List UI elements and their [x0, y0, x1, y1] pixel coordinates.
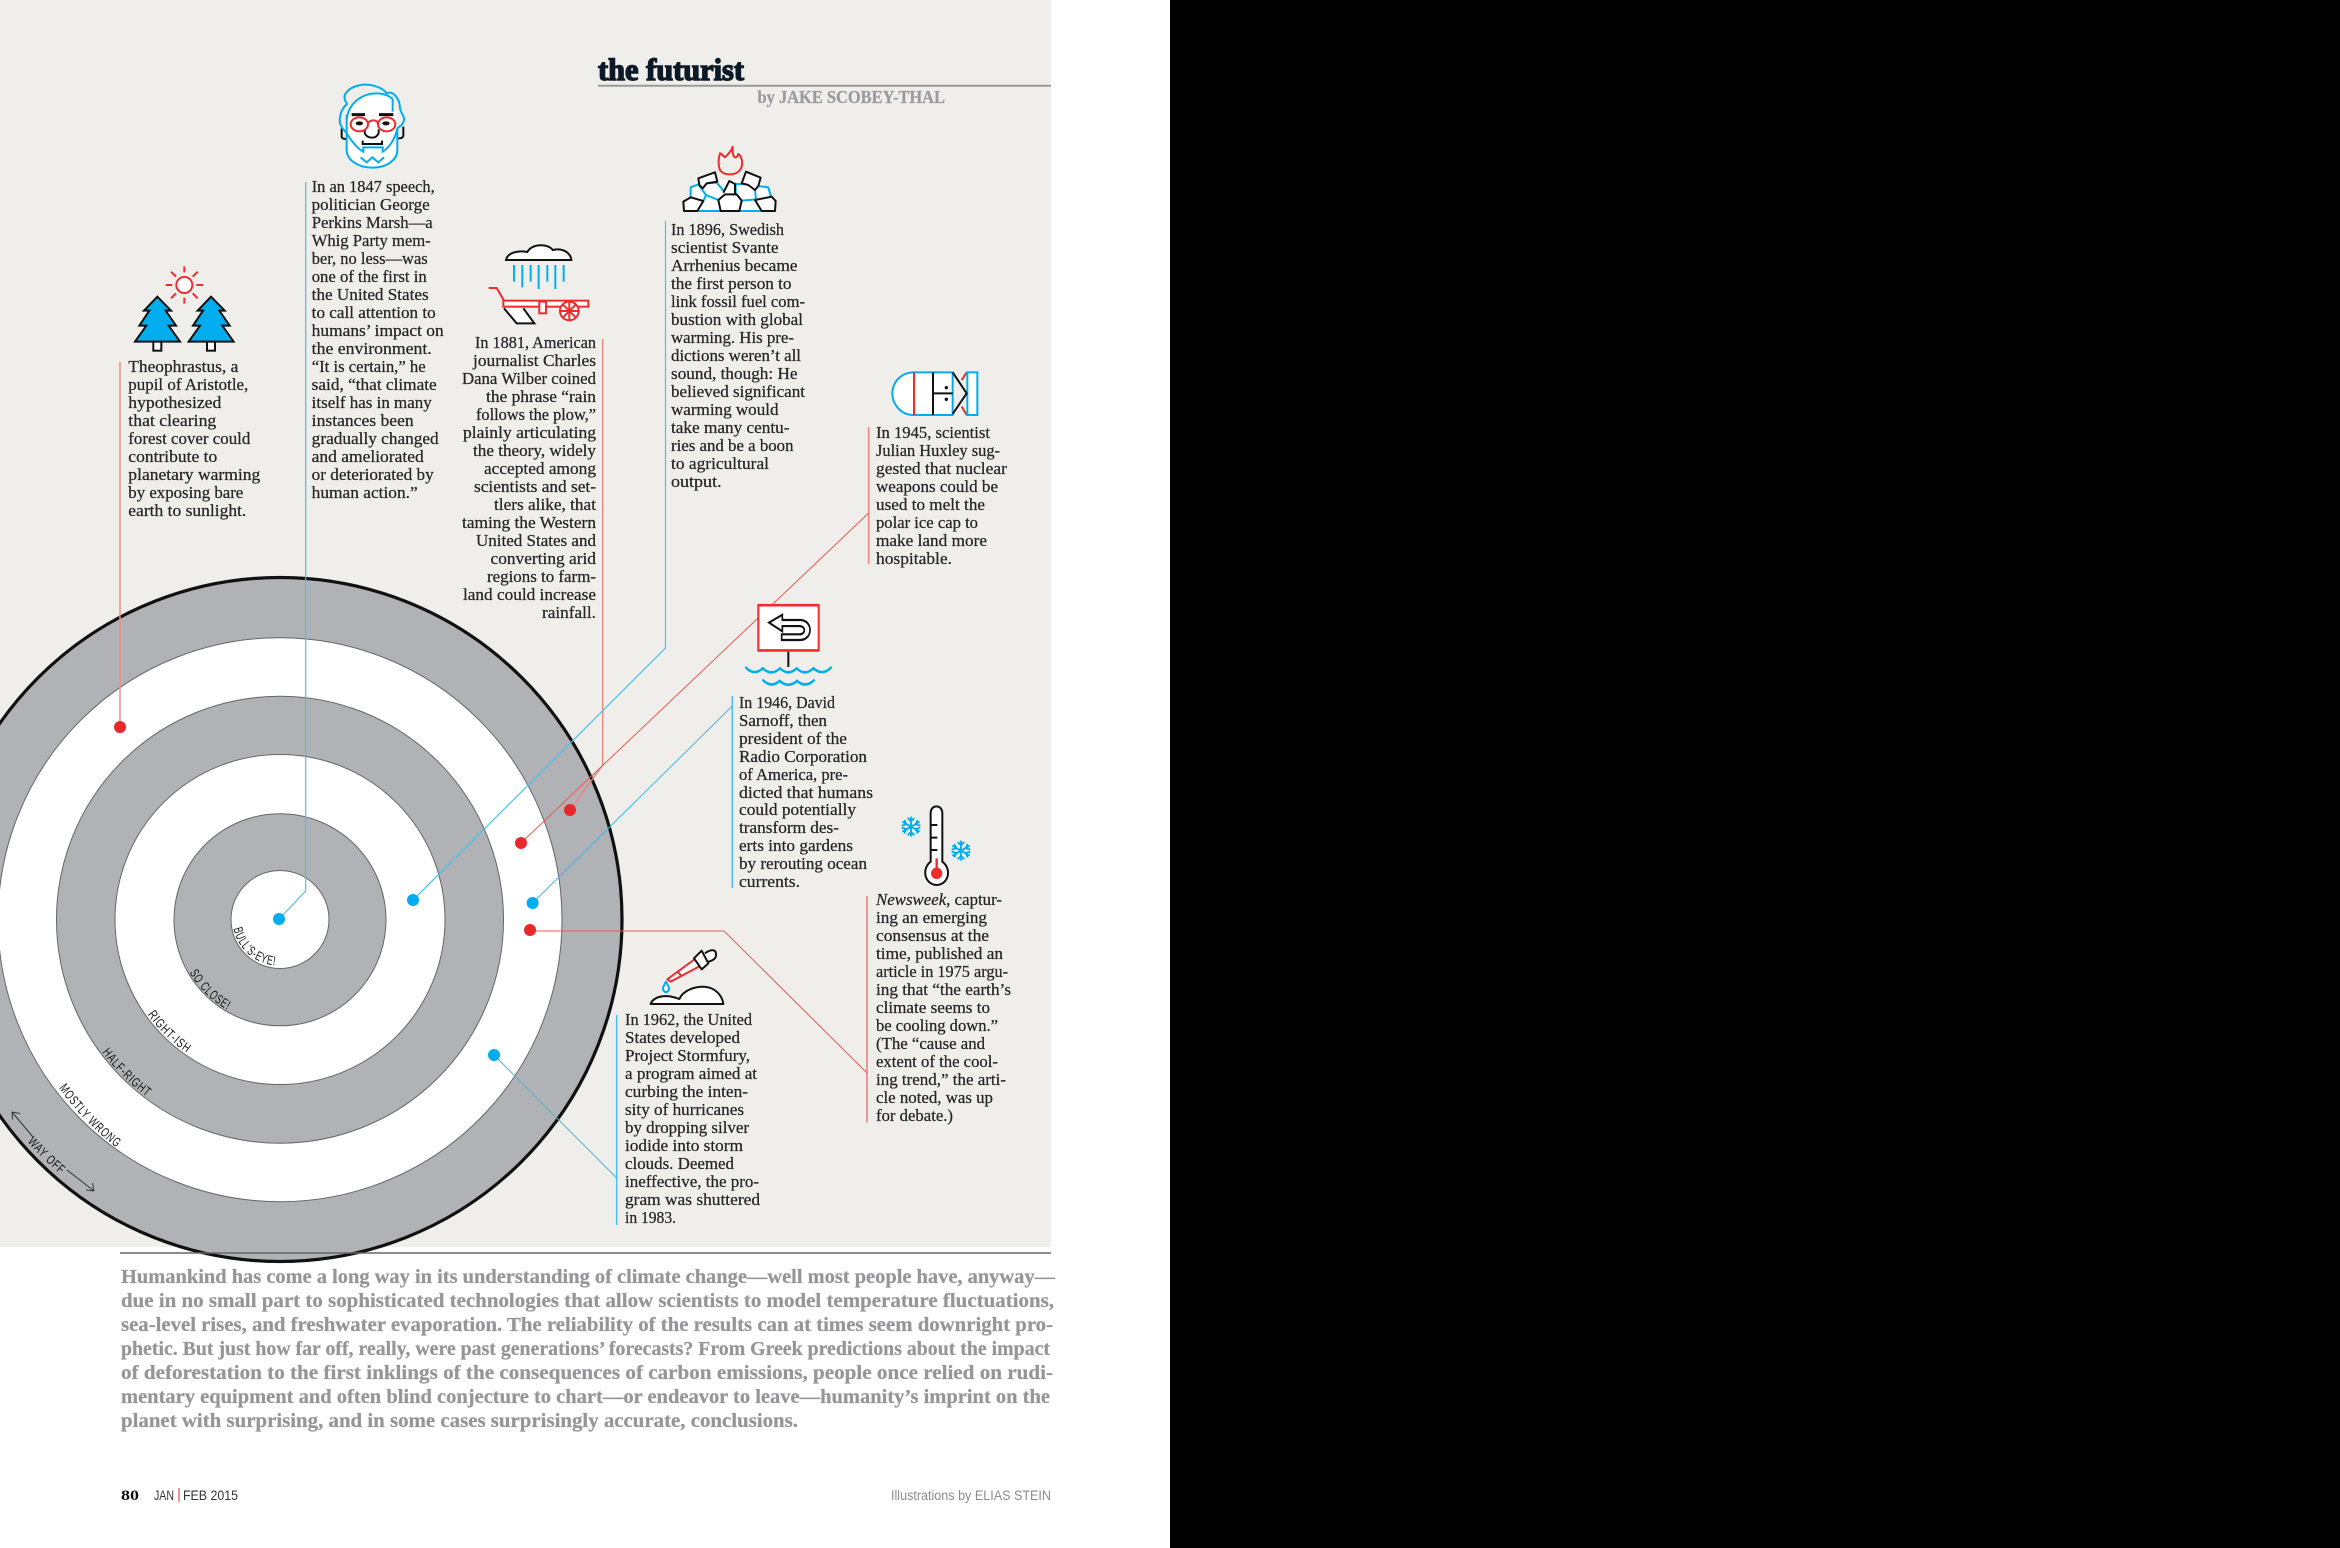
ring label: way off: WAY OFF	[28, 1136, 66, 1172]
text block: Theophrastus: earth to sunlight.	[128, 501, 246, 520]
byline: by JAKE SCOBEY-THAL	[758, 87, 945, 107]
icon: George Perkins Marsh portrait	[340, 85, 404, 168]
text block: Sarnoff: Sarnoff, then	[739, 711, 828, 730]
text block: Sarnoff: erts into gardens	[739, 836, 853, 855]
text block: Marsh: Perkins Marsh—a	[312, 213, 433, 232]
text block: Newsweek	[875, 890, 1011, 1125]
text block: Arrhenius: sound, though: He	[671, 364, 798, 383]
text block: Arrhenius: bustion with global	[671, 310, 803, 329]
header: the futurist: the futurist	[598, 52, 745, 87]
footer: illustration credit: Illustrations by ELIAS STEIN	[891, 1488, 1051, 1503]
text block: Sarnoff: of America, pre-	[739, 765, 848, 784]
text block: Marsh: to call attention to	[312, 303, 436, 322]
text block: Wilber: plainly articulating	[463, 423, 597, 442]
text block: Marsh: or deteriorated by	[312, 465, 434, 484]
text block: Arrhenius: output.	[671, 472, 722, 491]
text block: Stormfury: by dropping silver	[625, 1118, 749, 1137]
text block: Huxley: weapons could be	[876, 477, 998, 496]
ring label: half-right: HALF-RIGHT	[102, 1048, 152, 1096]
text block: Newsweek: Newsweek, captur-	[875, 890, 1002, 909]
text block: Huxley: used to melt the	[876, 495, 985, 514]
ring label: so close: SO CLOSE!	[190, 969, 231, 1010]
intro paragraph: mentary equipment and often blind conjecture to chart—or endeavor to leave—humanity’s imprint on the	[121, 1387, 1050, 1408]
text block: Sarnoff	[739, 693, 873, 891]
text block: Stormfury: ineffective, the pro-	[625, 1172, 759, 1191]
text block: Marsh: politician George	[312, 195, 430, 214]
text block: Wilber: scientists and set-	[474, 477, 596, 496]
text block: Theophrastus	[128, 357, 261, 520]
text block: Stormfury: in 1983.	[625, 1208, 676, 1227]
intro paragraph: phetic. But just how far off, really, were past generations’ forecasts? From Greek predictions about the impact	[121, 1339, 1051, 1360]
text block: Wilber: land could increase	[463, 585, 596, 604]
connector: Marsh	[273, 182, 306, 925]
text block: Marsh: the United States	[312, 285, 429, 304]
text block: Wilber: accepted among	[484, 459, 597, 478]
text block: Marsh: instances been	[312, 411, 414, 430]
text block: Newsweek: extent of the cool-	[876, 1052, 998, 1071]
intro paragraph: sea-level rises, and freshwater evaporation. The reliability of the results can at times seem downright pro-	[121, 1315, 1053, 1336]
connector: Theophrastus	[114, 362, 126, 733]
text block: Stormfury: a program aimed at	[625, 1064, 757, 1083]
text block: Wilber: Dana Wilber coined	[462, 369, 597, 388]
intro paragraph	[121, 1267, 1056, 1432]
text block: Wilber: follows the plow,”	[476, 405, 596, 424]
text block: Huxley: gested that nuclear	[876, 459, 1007, 478]
text block: Theophrastus: Theophrastus, a	[128, 357, 239, 376]
icon: trees and sun	[135, 266, 234, 351]
connector: Wilber	[564, 339, 603, 816]
text block: Wilber: the theory, widely	[473, 441, 597, 460]
text block: Huxley: hospitable.	[876, 549, 952, 568]
text block: Huxley	[876, 423, 1007, 568]
icon: dropper over storm cloud	[651, 950, 723, 1004]
text block: Arrhenius: ries and be a boon	[671, 436, 794, 455]
text block: Stormfury: In 1962, the United	[625, 1010, 753, 1029]
connector: Huxley	[515, 427, 869, 849]
icon: water sign	[745, 605, 832, 685]
text block: Theophrastus: by exposing bare	[128, 483, 243, 502]
text block: Marsh: one of the first in	[312, 267, 427, 286]
connector: Stormfury	[488, 1015, 617, 1225]
text block: Arrhenius	[671, 220, 805, 491]
text block: Stormfury: States developed	[625, 1028, 741, 1047]
text block: Sarnoff: Radio Corporation	[739, 747, 868, 766]
text block: Sarnoff: transform des-	[739, 818, 839, 837]
text block: Wilber: converting arid	[490, 549, 597, 568]
text block: Huxley: Julian Huxley sug-	[876, 441, 1000, 460]
connector: Newsweek	[524, 896, 867, 1123]
text block: Marsh: human action.”	[312, 483, 418, 502]
text block: Marsh: In an 1847 speech,	[312, 177, 435, 196]
text block: Sarnoff: by rerouting ocean	[739, 854, 868, 873]
text block: Newsweek: ing trend,” the arti-	[876, 1070, 1006, 1089]
text block: Arrhenius: link fossil fuel com-	[671, 292, 805, 311]
text block: Marsh: and ameliorated	[312, 447, 424, 466]
black offset area	[1170, 0, 2340, 1548]
footer: folio: JAN	[154, 1488, 174, 1503]
text block: Sarnoff: could potentially	[739, 800, 857, 819]
text block: Huxley: In 1945, scientist	[876, 423, 990, 442]
icon: cloud, rain and plow	[489, 245, 588, 323]
text block: Marsh: “It is certain,” he	[312, 357, 426, 376]
text block: Wilber: tlers alike, that	[494, 495, 596, 514]
text block: Newsweek: ing that “the earth’s	[876, 980, 1011, 999]
text block: Stormfury: gram was shuttered	[625, 1190, 761, 1209]
text block: Newsweek: be cooling down.”	[876, 1016, 998, 1035]
text block: Theophrastus: contribute to	[128, 447, 217, 466]
text block: Wilber: United States and	[476, 531, 597, 550]
ring label: right-ish: RIGHT-ISH	[148, 1010, 192, 1052]
text block: Stormfury: clouds. Deemed	[625, 1154, 735, 1173]
text block: Arrhenius: warming. His pre-	[671, 328, 794, 347]
text block: Wilber: journalist Charles	[472, 351, 596, 370]
text block: Wilber: the phrase “rain	[486, 387, 597, 406]
text block: Wilber	[462, 333, 597, 622]
intro paragraph: of deforestation to the first inklings of the consequences of carbon emissions, people once relied on rudi-	[121, 1363, 1053, 1384]
text block: Theophrastus: pupil of Aristotle,	[128, 375, 248, 394]
text block: Arrhenius: dictions weren’t all	[671, 346, 801, 365]
text block: Stormfury: curbing the inten-	[625, 1082, 748, 1101]
icon: thermometer and snowflakes	[902, 806, 970, 885]
text block: Marsh: humans’ impact on	[312, 321, 444, 340]
text block: Theophrastus: hypothesized	[128, 393, 222, 412]
text block: Newsweek: for debate.)	[876, 1106, 953, 1125]
text block: Theophrastus: that clearing	[128, 411, 217, 430]
text block: Newsweek: consensus at the	[876, 926, 989, 945]
target chart: concentric accuracy rings	[0, 576, 624, 1264]
text block: Arrhenius: believed significant	[671, 382, 805, 401]
text block: Marsh: Whig Party mem-	[312, 231, 431, 250]
text block: Arrhenius: take many centu-	[671, 418, 790, 437]
text block: Huxley: polar ice cap to	[876, 513, 978, 532]
text block: Stormfury	[625, 1010, 761, 1227]
text block: Newsweek: (The “cause and	[876, 1034, 986, 1053]
connector: Arrhenius	[407, 221, 666, 906]
arrow: way off span	[12, 1112, 94, 1191]
text block: Arrhenius: scientist Svante	[671, 238, 778, 257]
text block: Sarnoff: president of the	[739, 729, 847, 748]
text block: Marsh	[312, 177, 444, 502]
ring label: mostly wrong: MOSTLY WRONG	[59, 1083, 120, 1146]
text block: Sarnoff: In 1946, David	[739, 693, 836, 712]
text block: Marsh: said, “that climate	[312, 375, 437, 394]
footer: folio	[121, 1488, 238, 1504]
text block: Wilber: taming the Western	[462, 513, 597, 532]
text block: Wilber: In 1881, American	[475, 333, 597, 352]
intro paragraph: planet with surprising, and in some cases surprisingly accurate, conclusions.	[121, 1411, 798, 1432]
icon: burning fossil fuel pile	[683, 147, 776, 211]
text block: Stormfury: iodide into storm	[625, 1136, 743, 1155]
text block: Huxley: make land more	[876, 531, 987, 550]
text block: Marsh: itself has in many	[312, 393, 432, 412]
text block: Sarnoff: dicted that humans	[739, 783, 873, 802]
connector: Sarnoff	[527, 696, 732, 909]
top rule under the illustration	[120, 1252, 1051, 1254]
text block: Marsh: ber, no less—was	[312, 249, 428, 268]
text block: Newsweek: ing an emerging	[876, 908, 988, 927]
ring label: bull's-eye: BULL'S-EYE!	[234, 926, 276, 966]
panel: beige illustration background	[0, 0, 1051, 1247]
text block: Stormfury: Project Stormfury,	[625, 1046, 750, 1065]
text block: Marsh: the environment.	[312, 339, 432, 358]
text block: Arrhenius: warming would	[671, 400, 779, 419]
text block: Sarnoff: currents.	[739, 872, 800, 891]
text block: Newsweek: article in 1975 argu-	[876, 962, 1008, 981]
text block: Wilber: regions to farm-	[487, 567, 596, 586]
text block: Arrhenius: to agricultural	[671, 454, 769, 473]
intro paragraph: due in no small part to sophisticated technologies that allow scientists to model temperature fluctuations,	[121, 1291, 1054, 1312]
icon: atomic bomb	[892, 372, 977, 415]
text block: Newsweek: cle noted, was up	[876, 1088, 993, 1107]
text block: Arrhenius: In 1896, Swedish	[671, 220, 785, 239]
text block: Arrhenius: Arrhenius became	[671, 256, 798, 275]
footer: folio: 80	[121, 1488, 139, 1504]
footer: folio: FEB 2015	[183, 1488, 238, 1503]
text block: Arrhenius: the first person to	[671, 274, 792, 293]
text block: Newsweek: climate seems to	[876, 998, 990, 1017]
text block: Marsh: gradually changed	[312, 429, 439, 448]
text block: Newsweek: time, published an	[876, 944, 1004, 963]
text block: Theophrastus: forest cover could	[128, 429, 251, 448]
intro paragraph: Humankind has come a long way in its understanding of climate change—well most people have, anyway—	[121, 1267, 1056, 1288]
text block: Stormfury: sity of hurricanes	[625, 1100, 744, 1119]
text block: Wilber: rainfall.	[542, 603, 596, 622]
text block: Theophrastus: planetary warming	[128, 465, 261, 484]
